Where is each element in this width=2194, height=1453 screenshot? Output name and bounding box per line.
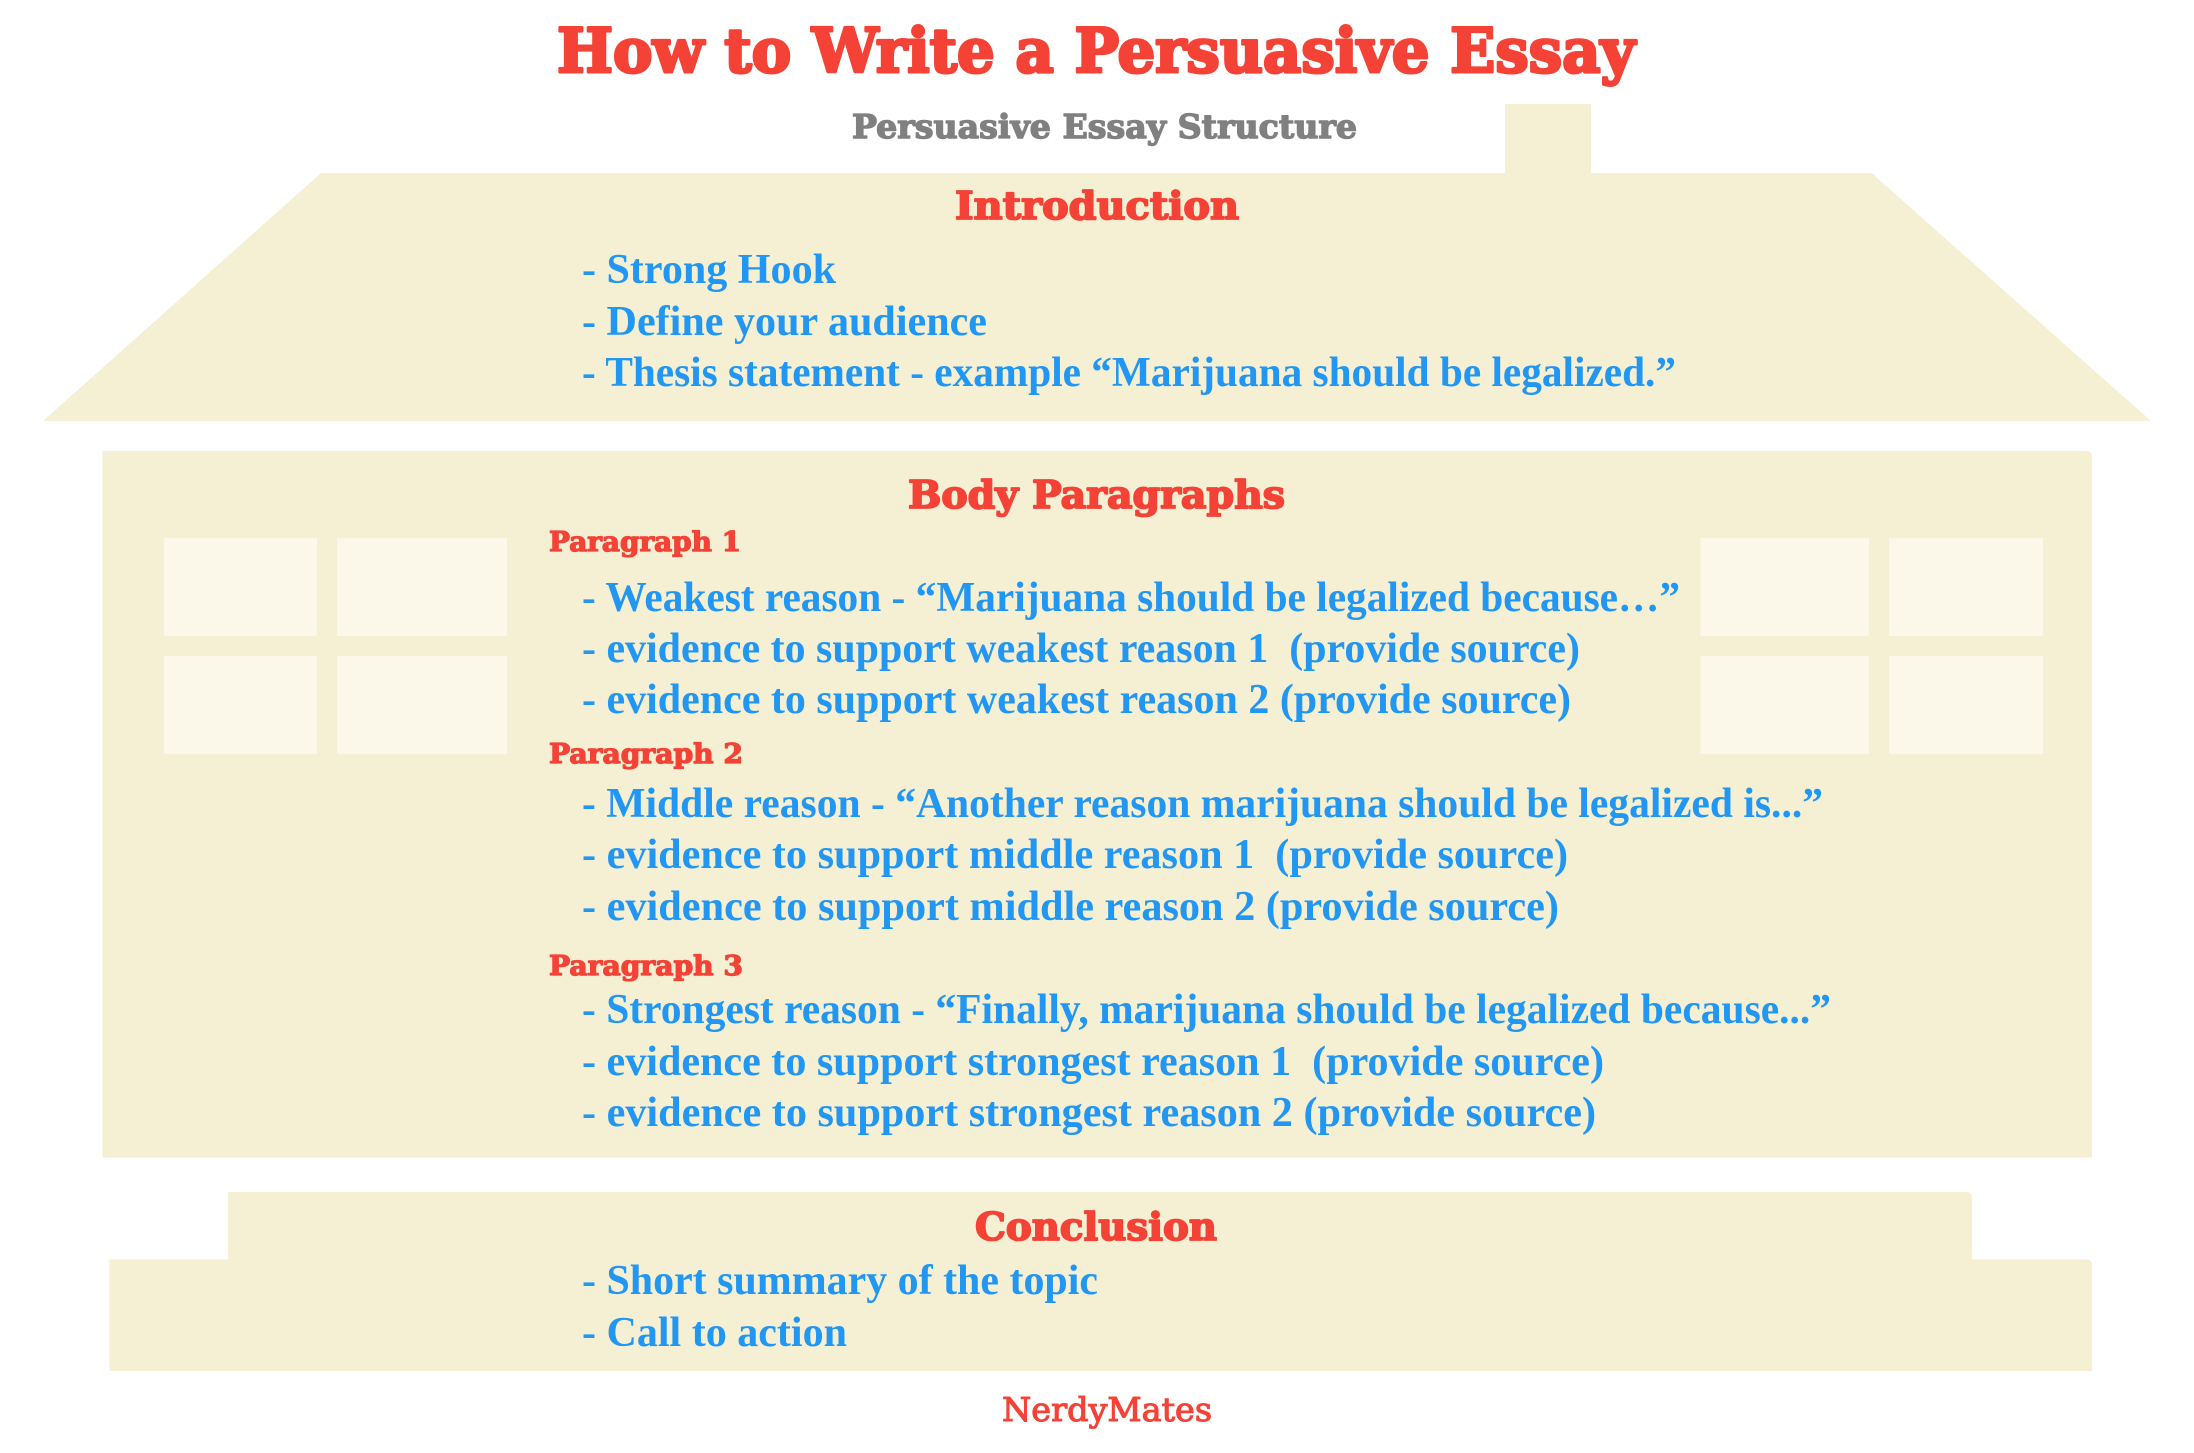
paragraph 2 list: - evidence to support middle reason 2 (provide source): [582, 884, 1559, 930]
paragraph 3 list: - Strongest reason - “Finally, marijuana should be legalized because...”: [582, 987, 1831, 1033]
introduction list: - Define your audience: [582, 299, 987, 345]
subtitle: Persuasive Essay Structure: [852, 107, 1357, 146]
paragraph 3 list: [582, 987, 1831, 1136]
left windows: [164, 538, 507, 754]
panel: conclusion (foundation): [110, 1192, 2092, 1371]
paragraph 3 list: - evidence to support strongest reason 2 (provide source): [582, 1090, 1596, 1136]
introduction list: - Strong Hook: [582, 247, 837, 293]
paragraph 3 list: - evidence to support strongest reason 1 (provide source): [582, 1039, 1604, 1085]
paragraph 1 list: - Weakest reason - “Marijuana should be legalized because…”: [582, 575, 1680, 621]
paragraph 1 list: - evidence to support weakest reason 1 (provide source): [582, 626, 1580, 672]
panel: introduction (roof): [43, 104, 2151, 421]
foundation shape: [110, 1192, 2092, 1371]
right windows: [1700, 538, 2043, 754]
roof shape: [43, 173, 2151, 421]
conclusion list: - Call to action: [582, 1310, 847, 1356]
paragraph 2 list: - Middle reason - “Another reason marijuana should be legalized is...”: [582, 781, 1823, 827]
subheading: paragraph 1: Paragraph 1: [549, 527, 741, 558]
title: How to Write a Persuasive Essay: [557, 16, 1636, 87]
conclusion list: [582, 1258, 1098, 1356]
introduction list: - Thesis statement - example “Marijuana should be legalized.”: [582, 350, 1676, 396]
paragraph 2 list: [582, 781, 1823, 930]
subheading: paragraph 3: Paragraph 3: [549, 951, 743, 982]
heading: introduction: Introduction: [955, 183, 1239, 228]
wall shape: [102, 451, 2092, 1158]
paragraph 1 list: - evidence to support weakest reason 2 (provide source): [582, 677, 1571, 723]
paragraph 2 list: - evidence to support middle reason 1 (provide source): [582, 832, 1568, 878]
heading: body paragraphs: Body Paragraphs: [908, 472, 1285, 517]
chimney: [1505, 104, 1591, 174]
paragraph 1 list: [582, 575, 1680, 723]
brand credit: NerdyMates: [1002, 1390, 1212, 1429]
introduction list: [582, 247, 1676, 396]
conclusion list: - Short summary of the topic: [582, 1258, 1098, 1304]
panel: body paragraphs (house wall): [102, 451, 2092, 1158]
heading: conclusion: Conclusion: [975, 1204, 1217, 1249]
subheading: paragraph 2: Paragraph 2: [549, 739, 743, 770]
